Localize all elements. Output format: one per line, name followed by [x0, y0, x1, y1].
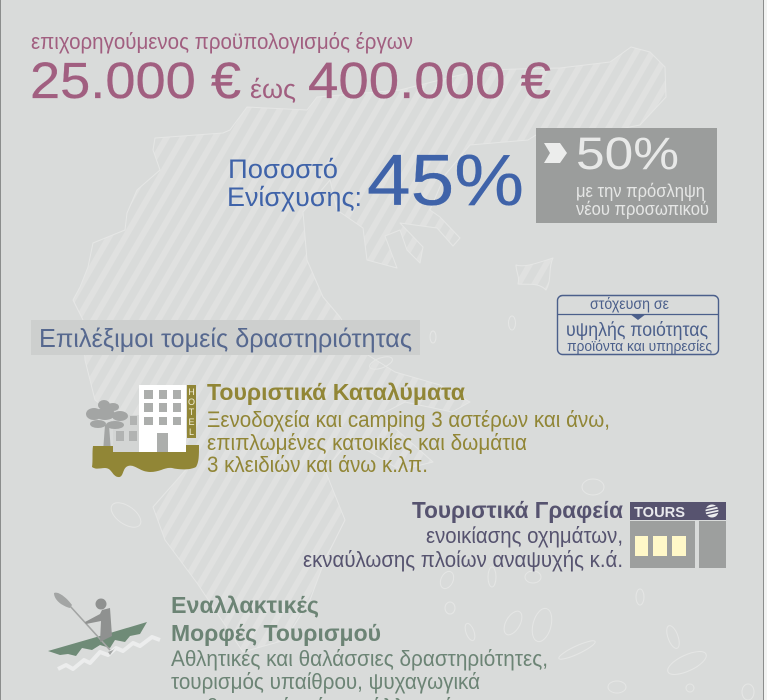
- accommodation title: Τουριστικά Καταλύματα: [207, 379, 465, 405]
- hotel sign: [187, 385, 196, 438]
- globe: [705, 504, 719, 518]
- callout frame: [558, 296, 718, 354]
- word: to: έως: [250, 74, 296, 104]
- islands: [107, 316, 754, 700]
- agencies title: Τουριστικά Γραφεία: [412, 497, 623, 523]
- alternative title line 2: Μορφές Τουρισμού: [171, 620, 381, 646]
- paddler: [85, 598, 112, 642]
- back building: [113, 415, 140, 453]
- bonus box: [536, 128, 717, 223]
- shop windows: [635, 536, 686, 556]
- block: tourist accommodation: [207, 379, 610, 477]
- accommodation line 2: επιπλωμένες κατοικίες και δωμάτια: [207, 430, 527, 455]
- rate value: 45%: [367, 141, 524, 221]
- icon: hotel: L: [189, 427, 194, 437]
- heading text: Επιλέξιμοι τομείς δραστηριότητας: [39, 323, 412, 353]
- block: travel agencies: [303, 497, 623, 572]
- subsidy rate: [227, 141, 524, 221]
- icon: tours shop: [630, 502, 726, 568]
- budget heading: [30, 29, 551, 109]
- main building: [139, 385, 186, 453]
- icon: hotel: T: [189, 407, 195, 417]
- map of Greece: [73, 47, 666, 652]
- panel: 50% bonus: [536, 128, 717, 223]
- icon: hotel: O: [188, 397, 195, 407]
- tree: [86, 400, 128, 452]
- accommodation line 1: Ξενοδοχεία και camping 3 αστέρων και άνω,: [207, 407, 610, 432]
- rate label line 1: Ποσοστό: [228, 154, 338, 184]
- icon: hotel: H: [188, 387, 195, 397]
- wave: [58, 637, 160, 669]
- agencies line 1: ενοικίασης οχημάτων,: [426, 523, 623, 548]
- shop front: [630, 521, 695, 568]
- icon: kayak: [48, 593, 160, 669]
- section heading: [31, 320, 420, 355]
- shop sign: [630, 502, 726, 520]
- callout line 1: στόχευση σε: [590, 296, 669, 313]
- shop door: [699, 521, 726, 568]
- icon: hotel: E: [188, 417, 195, 427]
- callout pointer: [630, 314, 646, 320]
- callout: targeting quality: [558, 296, 718, 355]
- callout line 3: προϊόντα και υπηρεσίες: [567, 338, 712, 355]
- rate label line 2: Ενίσχυσης:: [227, 182, 362, 212]
- ground: [92, 445, 199, 477]
- paddle: [54, 593, 115, 655]
- shop sign text: TOURS: [634, 504, 685, 521]
- minimum amount: 25.000 €: [30, 52, 241, 109]
- right margin: [764, 0, 767, 700]
- heading band: [31, 320, 420, 355]
- callout divider: [558, 314, 718, 316]
- icon: hotel: [86, 385, 199, 477]
- alternative line 2: τουρισμός υπαίθρου, ψυχαγωγικά: [171, 669, 480, 694]
- block: alternative tourism: [171, 592, 548, 700]
- icon: chevron: [544, 143, 567, 163]
- callout line 2: υψηλής ποιότητας: [566, 319, 708, 341]
- bonus value: 50%: [576, 128, 679, 179]
- maximum amount: 400.000 €: [308, 52, 551, 109]
- bonus text line 1: με την πρόσληψη: [576, 181, 705, 201]
- boat: [48, 622, 147, 656]
- agencies line 2: εκναύλωσης πλοίων αναψυχής κ.ά.: [303, 547, 623, 572]
- bonus text line 2: νέου προσωπικού: [576, 199, 709, 219]
- alternative title line 1: Εναλλακτικές: [171, 592, 319, 618]
- budget label: επιχορηγούμενος προϋπολογισμός έργων: [31, 29, 413, 54]
- alternative line 1: Αθλητικές και θαλάσσιες δραστηριότητες,: [171, 646, 548, 671]
- accommodation line 3: 3 κλειδιών και άνω κ.λπ.: [207, 452, 428, 477]
